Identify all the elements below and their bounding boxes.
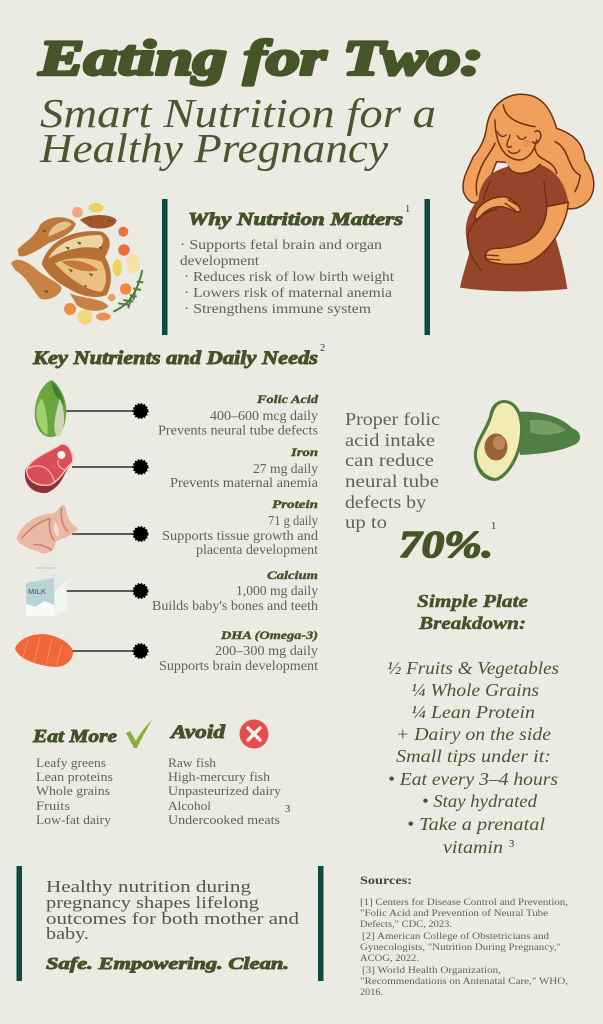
callout: folic acid statistic: up to: [345, 512, 387, 532]
heading: simple plate breakdown: Simple Plate: [417, 591, 528, 611]
nutrient: folic acid: Folic Acid: [256, 392, 319, 406]
heading: why nutrition matters: Why Nutrition Matters: [188, 209, 403, 229]
tagline: Safe. Empowering. Clean.: [46, 954, 289, 973]
nutrient: protein: 71 g daily: [268, 513, 318, 528]
list: eat more: Lean proteins: [36, 770, 113, 784]
callout: folic acid statistic: acid intake: [345, 430, 435, 450]
icon: raw chicken: [17, 505, 78, 553]
bullet list: why nutrition matters: · Lowers risk of maternal anemia: [184, 285, 392, 300]
icon: check mark: [126, 720, 152, 748]
heading: sources: Sources:: [360, 875, 412, 887]
heading: eat more: Eat More: [32, 726, 117, 746]
icon: milk carton: [26, 568, 67, 616]
divider bar left: [162, 199, 168, 335]
nutrient: DHA: Supports brain development: [159, 658, 318, 673]
footnote 1: 1: [405, 204, 410, 215]
icon: avocado: [474, 400, 580, 481]
list: plate breakdown and tips: • Stay hydrated: [422, 791, 537, 811]
callout: folic acid statistic: neural tube: [345, 471, 439, 491]
nutrient: DHA: [159, 628, 318, 673]
list: avoid: Alcohol: [168, 799, 212, 813]
statistic: 70%: 70%.: [399, 524, 493, 566]
icon: steak: [25, 443, 73, 493]
text block: references: "Recommendations on Antenatal Care," WHO,: [360, 977, 568, 987]
list: avoid: [168, 756, 282, 827]
list: plate breakdown and tips: ¼ Lean Protein: [411, 702, 535, 722]
list: plate breakdown and tips: ½ Fruits & Vegetables: [387, 658, 559, 678]
icon: pregnant woman: [460, 94, 594, 291]
footnote 1: 1: [491, 521, 496, 532]
text block: references: [3] World Health Organization,: [362, 966, 501, 976]
list: eat more: Leafy greens: [36, 756, 106, 770]
nutrient: iron: 27 mg daily: [253, 461, 318, 476]
subtitle: [39, 90, 436, 171]
divider bar left: [16, 866, 22, 981]
icon: cabbage: [35, 380, 66, 437]
text block: references: [360, 897, 568, 998]
nutrient: protein: [162, 497, 318, 557]
list: eat more: [36, 756, 113, 827]
list: plate breakdown and tips: [387, 658, 559, 857]
list: avoid: Raw fish: [168, 756, 217, 770]
bullet list: why nutrition matters: [180, 237, 394, 316]
nutrient: iron: Prevents maternal anemia: [170, 475, 318, 490]
list: eat more: Whole grains: [36, 784, 110, 798]
callout: folic acid statistic: Proper folic: [345, 409, 440, 429]
list: plate breakdown and tips: Small tips under it:: [396, 746, 551, 766]
bullet list: why nutrition matters: · Supports fetal brain and organ: [180, 237, 382, 252]
footnote 2: 2: [320, 343, 325, 354]
icon: milk carton: MILK: [28, 587, 47, 596]
subtitle: Healthy Pregnancy: [39, 125, 389, 171]
nutrient: iron: [170, 445, 318, 490]
list: eat more: Fruits: [36, 799, 70, 813]
bullet list: why nutrition matters: · Reduces risk of low birth weight: [184, 269, 394, 284]
list: plate breakdown and tips: • Eat every 3–4 hours: [388, 769, 558, 789]
bullet list: why nutrition matters: development: [180, 253, 259, 268]
divider bar right: [318, 866, 324, 981]
nutrient: calcium: Builds baby's bones and teeth: [152, 598, 318, 613]
text block: references: 2016.: [360, 988, 383, 998]
text block: references: "Folic Acid and Prevention of Neural Tube: [360, 908, 548, 919]
text block: closing statement: Healthy nutrition during: [46, 877, 251, 896]
nutrient: DHA: 200–300 mg daily: [215, 643, 318, 658]
nutrient: protein: Protein: [272, 497, 318, 511]
callout: folic acid statistic: can reduce: [345, 450, 434, 470]
bullet list: why nutrition matters: · Strengthens immune system: [184, 301, 372, 316]
list: avoid: Unpasteurized dairy: [168, 784, 282, 798]
text block: closing statement: [46, 877, 300, 943]
list: eat more: Low-fat dairy: [36, 813, 112, 827]
text block: references: [2] American College of Obstetricians and: [362, 931, 549, 942]
text block: closing statement: pregnancy shapes lifelong: [46, 893, 259, 912]
heading: simple plate breakdown: [417, 591, 528, 633]
text block: references: ACOG, 2022.: [360, 954, 419, 964]
heading: simple plate breakdown: Breakdown:: [418, 613, 526, 633]
callout: folic acid statistic: defects by: [345, 492, 426, 512]
nutrient: folic acid: Prevents neural tube defects: [158, 422, 318, 438]
icon: salmon: [15, 634, 73, 667]
text block: references: Gynecologists, "Nutrition During Pregnancy,": [360, 943, 561, 953]
nutrient: iron: Iron: [290, 445, 318, 459]
icon: avoid cross: [240, 720, 268, 748]
subtitle: Smart Nutrition for a: [40, 90, 436, 136]
list: avoid: High-mercury fish: [168, 770, 271, 784]
nutrient: DHA: DHA (Omega-3): [220, 628, 318, 642]
divider bar right: [424, 199, 430, 335]
footnote 3: 3: [509, 839, 514, 850]
list: plate breakdown and tips: vitamin: [443, 837, 503, 857]
text block: closing statement: baby.: [46, 924, 89, 943]
nutrient: protein: placenta development: [196, 542, 318, 557]
footnote 3: 3: [285, 804, 290, 815]
text block: references: Defects," CDC, 2023.: [360, 919, 452, 930]
nutrient: calcium: 1,000 mg daily: [236, 583, 318, 598]
nutrient: calcium: [152, 568, 318, 613]
callout: folic acid statistic: [345, 409, 440, 532]
heading: avoid: Avoid: [170, 723, 226, 743]
connector lines and dots: [66, 404, 148, 658]
nutrient: protein: Supports tissue growth and: [162, 528, 318, 543]
list: avoid: Undercooked meats: [168, 813, 280, 827]
list: plate breakdown and tips: ¼ Whole Grains: [411, 680, 539, 700]
icon: roast chicken platter: [11, 203, 143, 324]
nutrient: calcium: Calcium: [267, 568, 318, 582]
nutrient: folic acid: [158, 392, 319, 438]
text block: references: [1] Centers for Disease Control and Prevention,: [360, 897, 568, 908]
heading: key nutrients: Key Nutrients and Daily Needs: [32, 349, 318, 369]
nutrient: folic acid: 400–600 mcg daily: [210, 408, 318, 423]
list: plate breakdown and tips: + Dairy on the side: [396, 724, 551, 744]
text block: closing statement: outcomes for both mother and: [46, 909, 300, 928]
list: plate breakdown and tips: • Take a prenatal: [407, 814, 545, 834]
title: Eating for Two:: [38, 30, 483, 86]
